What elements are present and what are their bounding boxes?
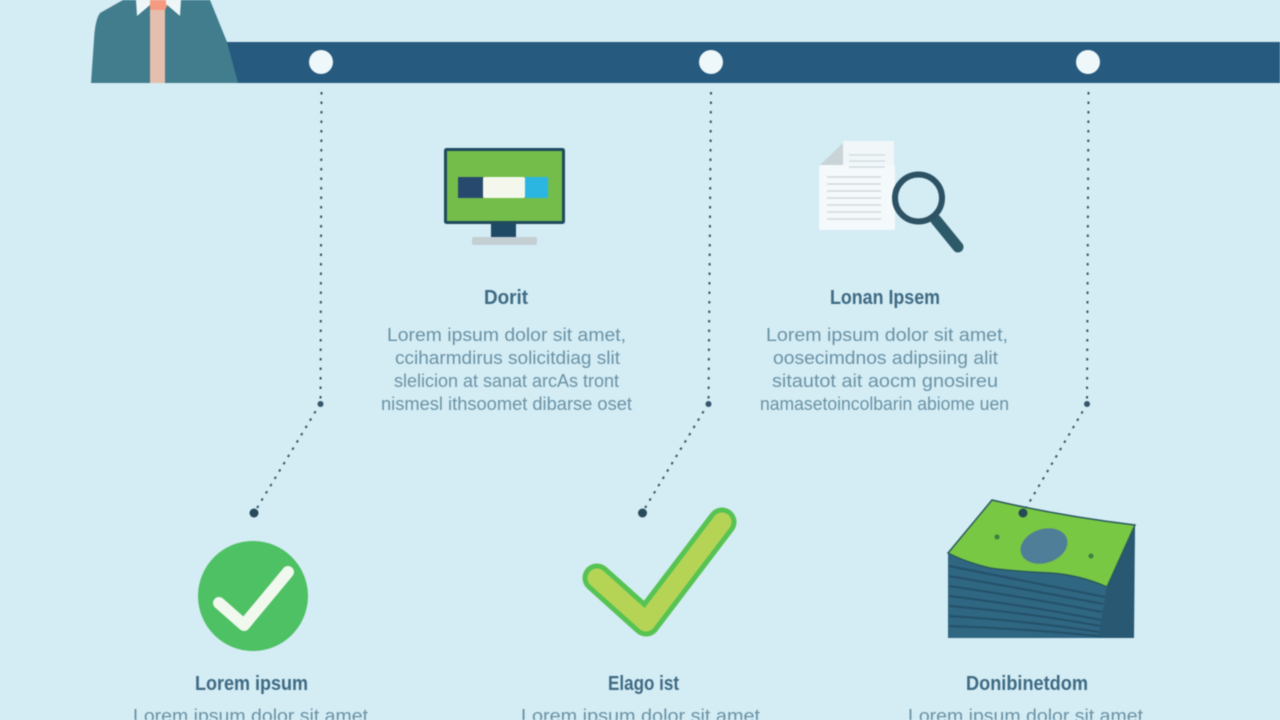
heading: Donibinetdom: Donibinetdom: [966, 673, 1088, 695]
body text: column 3: Lorem ipsum dolor sit amet,: [766, 325, 1008, 345]
body text: column 2: slelicion at sanat arcAs tront: [394, 371, 619, 391]
panel: column 1 bottom text: [133, 673, 368, 720]
dotted connector 2: [638, 92, 712, 518]
dotted connector 3: [1023, 92, 1090, 513]
body text: column 3: sitautot ait aocm gnosireu: [772, 371, 998, 391]
icon: large check mark: [597, 522, 722, 622]
body text: column 3: [760, 325, 1009, 414]
body text: column 2: Lorem ipsum dolor sit amet,: [387, 325, 626, 345]
heading: Dorit: Dorit: [484, 287, 528, 309]
panel: column 2 bottom text: [521, 673, 760, 720]
icon: stack of money: [948, 500, 1135, 638]
timeline node 2: [699, 50, 723, 74]
heading: Lorem ipsum: Lorem ipsum: [195, 673, 308, 695]
body text: column 3: oosecimdnos adipsiing alit: [773, 348, 998, 368]
panel: column 3 bottom text: [908, 673, 1143, 720]
icon: green circle check: [198, 541, 308, 651]
heading: Lonan Ipsem: Lonan Ipsem: [830, 287, 940, 309]
body text: column 3: namasetoincolbarin abiome uen: [760, 394, 1009, 414]
panel: column 3 text: [760, 287, 1009, 414]
body text: column 2: cciharmdirus solicitdiag slit: [395, 348, 620, 368]
body text: column 2: nismesl ithsoomet dibarse oset: [381, 394, 632, 414]
body text: column 2: [381, 325, 632, 414]
icon: monitor: [446, 150, 564, 245]
heading: Elago ist: Elago ist: [608, 673, 679, 695]
icon: document and magnifier: [819, 141, 958, 247]
timeline node 3: [1076, 50, 1100, 74]
panel: column 2 text: [381, 287, 632, 414]
dotted connector 1: [250, 92, 324, 518]
timeline node 1: [309, 50, 333, 74]
person figure: [91, 0, 238, 83]
timeline bar: [226, 42, 1280, 83]
